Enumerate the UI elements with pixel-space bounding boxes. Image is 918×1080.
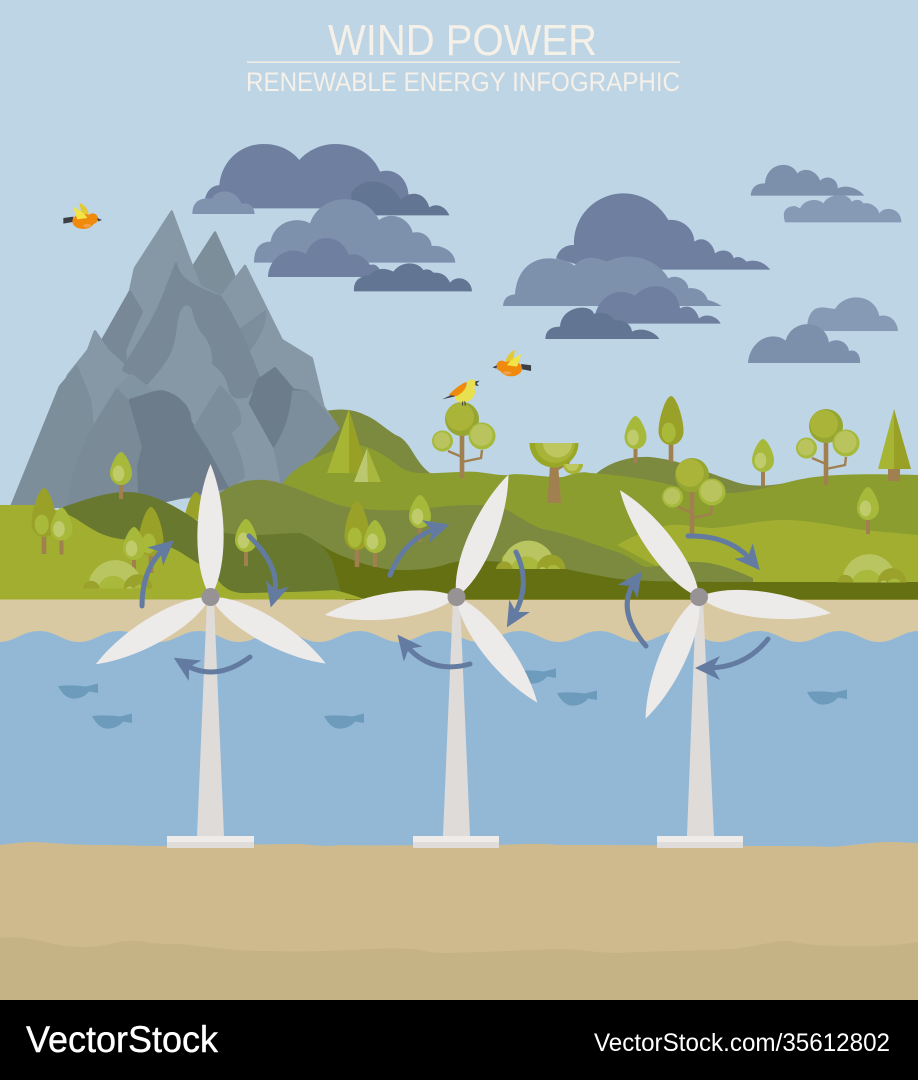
trees on skyline bbox=[432, 396, 911, 503]
arrow bbox=[513, 552, 523, 617]
oval tree bbox=[138, 507, 164, 573]
shaded ridge left bbox=[102, 292, 142, 363]
cloud bbox=[204, 144, 409, 208]
main mountain silhouette bbox=[11, 212, 338, 510]
heading: wind power: WIND POWER bbox=[328, 16, 597, 65]
fish bbox=[807, 690, 847, 705]
fish bbox=[58, 684, 98, 699]
oval tree bbox=[364, 520, 386, 567]
bush bbox=[496, 541, 565, 594]
fish bbox=[92, 714, 132, 729]
far hill right bbox=[597, 457, 800, 500]
lower dark gully bbox=[130, 391, 230, 507]
small pine bbox=[354, 448, 381, 482]
oval tree bbox=[624, 416, 646, 463]
oval tree bbox=[658, 396, 684, 462]
oval tree bbox=[752, 439, 774, 486]
cloud bbox=[751, 165, 864, 196]
cloud bbox=[594, 286, 721, 324]
fish bbox=[324, 714, 364, 729]
tower bbox=[443, 600, 470, 836]
left lit spur bbox=[77, 332, 125, 433]
oval tree bbox=[123, 527, 145, 574]
light right slope bbox=[617, 520, 918, 590]
cloud bbox=[748, 324, 860, 363]
beach sand bbox=[0, 600, 918, 650]
far hill behind pines bbox=[300, 410, 460, 480]
cloud bbox=[784, 195, 901, 222]
cloud bbox=[503, 257, 722, 306]
wind turbine 1 bbox=[89, 464, 332, 848]
right dark gully bbox=[250, 368, 338, 473]
fish bbox=[516, 668, 556, 684]
round tree bbox=[796, 409, 860, 485]
arrow bbox=[627, 581, 646, 646]
oval tree bbox=[857, 487, 879, 534]
cloud bbox=[545, 308, 659, 339]
footer bar bbox=[0, 1000, 918, 1080]
arrow bbox=[707, 639, 768, 668]
oval tree bbox=[50, 508, 72, 554]
arrow bbox=[390, 528, 438, 575]
central dark ridge bbox=[123, 264, 260, 397]
subheading: RENEWABLE ENERGY INFOGRAPHIC bbox=[246, 67, 680, 97]
birds bbox=[63, 203, 531, 406]
trees on foreground hills bbox=[32, 452, 879, 574]
pine trees on mid hill bbox=[327, 409, 381, 482]
base bbox=[657, 836, 743, 848]
olive hill bbox=[220, 480, 753, 600]
title rule bbox=[247, 62, 680, 63]
bird flying right bbox=[63, 203, 102, 229]
clouds: right group bbox=[503, 165, 901, 363]
mid hill bbox=[283, 445, 918, 600]
bird flying left bbox=[492, 350, 531, 376]
oval tree bbox=[409, 495, 431, 542]
round tree bbox=[432, 402, 496, 478]
lower left dark face bbox=[68, 390, 143, 507]
cloud bbox=[268, 238, 380, 277]
arrow bbox=[405, 644, 470, 667]
dark valley band bbox=[277, 535, 918, 600]
yellow bird perched bbox=[442, 379, 480, 406]
lower spur bbox=[195, 387, 243, 487]
shaded ridge right bbox=[240, 312, 265, 353]
blades bbox=[323, 469, 548, 711]
bush bbox=[83, 560, 152, 613]
oval tree hidden behind hill bbox=[184, 492, 208, 558]
oval tree bbox=[110, 452, 132, 499]
cloud bbox=[254, 199, 455, 263]
footer url text: VectorStock.com/35612802 bbox=[594, 1029, 890, 1057]
title bbox=[246, 16, 680, 97]
shoreline edge bbox=[345, 599, 918, 600]
hub bbox=[448, 588, 466, 606]
fish bbox=[557, 690, 597, 706]
tower bbox=[197, 600, 224, 836]
cloud bbox=[556, 193, 770, 270]
lower sea bed bbox=[0, 937, 918, 1000]
dark green hill bbox=[63, 492, 343, 600]
cloud bbox=[351, 182, 449, 215]
sea bed bbox=[0, 842, 918, 1000]
fish bbox=[58, 668, 847, 729]
arrow bbox=[688, 536, 752, 561]
water bbox=[0, 631, 918, 860]
blades bbox=[609, 482, 833, 724]
cloud bbox=[807, 297, 898, 331]
arrow bbox=[249, 536, 276, 596]
tower bbox=[687, 600, 714, 836]
cloud bbox=[192, 192, 255, 214]
oval tree bbox=[235, 519, 257, 566]
oval tree bbox=[32, 488, 56, 554]
left light meadow bbox=[0, 505, 367, 600]
bush bbox=[837, 554, 906, 607]
mountain bbox=[11, 212, 338, 510]
base bbox=[167, 836, 254, 848]
clouds: left group bbox=[192, 144, 472, 291]
oval tree bbox=[344, 501, 370, 567]
left lower face bbox=[11, 367, 93, 507]
round tree bbox=[662, 458, 726, 534]
wind turbine 3 bbox=[609, 482, 833, 848]
central shoulder bbox=[117, 375, 153, 400]
cloud bbox=[354, 263, 472, 291]
blades bbox=[89, 464, 332, 676]
hub bbox=[690, 588, 708, 606]
large pine bbox=[327, 409, 368, 473]
footer logo text: VectorStock bbox=[26, 1019, 218, 1060]
bushes bbox=[83, 541, 906, 613]
pine right bbox=[878, 409, 911, 481]
wind turbine 2 bbox=[323, 469, 548, 848]
right lower face bbox=[275, 392, 338, 490]
hub bbox=[202, 588, 220, 606]
arrow bbox=[184, 657, 250, 672]
rotation arrows bbox=[142, 528, 768, 672]
umbrella tree bbox=[530, 443, 583, 503]
back peak bbox=[187, 233, 247, 323]
base bbox=[413, 836, 499, 848]
arrow bbox=[142, 548, 165, 606]
